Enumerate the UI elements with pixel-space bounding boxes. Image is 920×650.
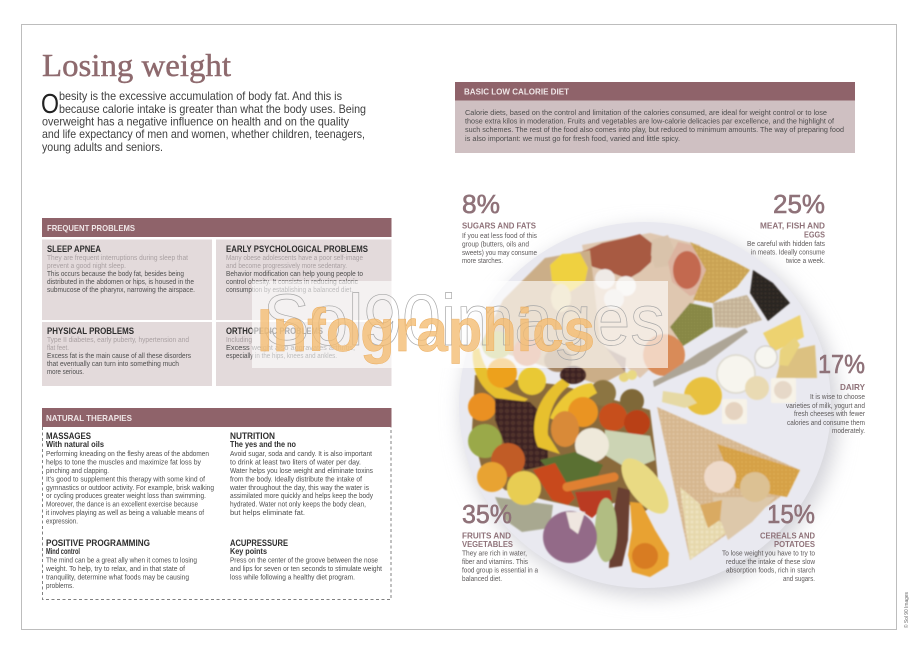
label: cereals and potatoes 15%: and sugars.: [783, 576, 815, 583]
therapy: massages: Moreover, the dance is an excellent exercise because: [46, 502, 198, 508]
panel: natural therapies: [42, 408, 392, 600]
card: sleep apnea: This occurs because the body fat, besides being: [47, 271, 184, 278]
label: meat, fish and eggs 25%: 25%: [773, 189, 825, 219]
label: dairy 17%: 17%: [818, 349, 865, 379]
therapy: massages: With natural oils: [46, 439, 104, 449]
label: sugars and fats 8%: 8%: [462, 189, 500, 219]
label: sugars and fats 8%: more starches.: [462, 258, 503, 265]
label: cereals and potatoes 15%: absorption foods, rich in starch: [726, 568, 815, 574]
label: fruits and vegetables 35%: VEGETABLES: [462, 539, 513, 549]
therapy: acupressure: Press on the center of the groove between the nose: [230, 558, 378, 564]
food: cereals and potatoes: [657, 407, 800, 560]
card: physical problems: [42, 322, 212, 386]
card: orthopedic problems: ORTHOPEDIC PROBLEMS: [226, 326, 323, 337]
therapy: massages: expression.: [46, 518, 78, 526]
therapy: massages: gymnastics or outdoor activity. For example, brisk walking: [46, 485, 214, 492]
natural therapies header: NATURAL THERAPIES: [46, 413, 132, 423]
label: meat, fish and eggs 25%: [747, 189, 825, 265]
panel: basic low calorie diet: those extra kilos in moderation. Fruits and vegetables are low-calorie delicacies par excellence, and the highlight of: [465, 118, 834, 126]
therapy: positive programming: [45, 538, 197, 590]
food: fruits and vegetables: [468, 348, 677, 577]
intro paragraph: [41, 88, 366, 154]
therapy: positive programming: weight. To help, try to relax, and in that state of: [45, 566, 185, 573]
therapy: massages: It's good to supplement this therapy with some kind of: [46, 476, 205, 484]
therapy: massages: helps to tone the muscles and maximize fat loss by: [46, 460, 201, 466]
panel: basic low calorie diet: BASIC LOW CALORIE DIET: [464, 86, 570, 96]
food: dairy: [662, 315, 817, 424]
credit line: © Sol 90 Images: [903, 592, 910, 628]
label: meat, fish and eggs 25%: EGGS: [804, 230, 825, 240]
label: cereals and potatoes 15%: [722, 499, 816, 583]
therapy: acupressure: Key points: [230, 546, 267, 556]
food: sugars and fats: [480, 250, 625, 385]
chart: food plate: [459, 222, 838, 596]
card: orthopedic problems: especially in the hips, knees and ankles.: [226, 353, 337, 360]
label: cereals and potatoes 15%: CEREALS AND: [760, 530, 815, 540]
label: cereals and potatoes 15%: To lose weight you have to try to: [722, 550, 815, 558]
label: fruits and vegetables 35%: FRUITS AND: [462, 530, 511, 540]
watermark: Infographics: [257, 297, 595, 364]
therapy: nutrition: Water helps you lose weight and eliminate toxins: [230, 468, 373, 475]
therapy: nutrition: from the body. Ideally distribute the intake of: [230, 476, 362, 484]
card: physical problems: more serious.: [47, 369, 84, 376]
therapy: massages: [46, 431, 214, 526]
card: physical problems: Type II diabetes, early puberty, hypertension and: [47, 337, 189, 344]
label: meat, fish and eggs 25%: Be careful with hidden fats: [747, 241, 825, 248]
card: early psychological problems: and become progressively more sedentary.: [226, 263, 347, 270]
natural therapies header: [42, 408, 392, 427]
label: cereals and potatoes 15%: 15%: [767, 499, 815, 529]
therapy: massages: it involves playing as well as being a valuable means of: [46, 510, 204, 517]
intro paragraph: young adults and seniors.: [42, 140, 163, 154]
title: Losing weight: [42, 47, 231, 83]
panel: basic low calorie diet: [455, 82, 855, 153]
therapy: positive programming: tranquility, determine what foods may be causing: [46, 574, 189, 582]
frequent problems header: FREQUENT PROBLEMS: [47, 223, 135, 233]
therapy: nutrition: [229, 431, 373, 517]
label: fruits and vegetables 35%: food group is essential in a: [462, 568, 538, 574]
card: sleep apnea: submucose of the pharynx, narrowing the airspace.: [47, 287, 195, 294]
therapy: massages: MASSAGES: [46, 431, 91, 442]
therapy: nutrition: hydrated. Water not only keeps the body clean,: [230, 502, 366, 508]
watermark: Sol90images: [263, 281, 665, 361]
label: fruits and vegetables 35%: [462, 499, 538, 583]
label: sugars and fats 8%: sweets) you may consume: [462, 250, 537, 257]
intro paragraph: and life expectancy of men and women, whether children, teenagers,: [42, 127, 365, 141]
card: early psychological problems: Behavior modification can help young people to: [226, 271, 363, 278]
card: physical problems: that eventually can turn into something much: [47, 361, 179, 368]
card: sleep apnea: distributed in the abdomen or hips, is housed in the: [47, 279, 194, 286]
intro paragraph: because calorie intake is greater than what the body uses. Being: [59, 102, 366, 116]
therapy: massages: pinching and clapping.: [46, 468, 109, 475]
therapy: nutrition: Avoid sugar, soda and candy. It is also important: [230, 451, 372, 458]
label: fruits and vegetables 35%: balanced diet.: [462, 576, 502, 583]
food: meat, fish and eggs: [582, 233, 790, 387]
intro paragraph: overweight has a negative influence on health and on the quality: [42, 114, 349, 128]
therapy: positive programming: The mind can be a great ally when it comes to losing: [46, 558, 197, 564]
natural therapies dashed border: [42, 427, 391, 600]
therapy: positive programming: Mind control: [46, 546, 80, 556]
panel: basic low calorie diet: Calorie diets, based on the control and limitation of the calories consumed, are ideal for weight control or to lose: [465, 110, 827, 117]
label: cereals and potatoes 15%: reduce the intake of these slow: [726, 559, 816, 566]
card: physical problems: flat feet.: [47, 345, 69, 352]
label: sugars and fats 8%: [462, 189, 537, 265]
therapy: nutrition: The yes and the no: [230, 439, 296, 449]
label: cereals and potatoes 15%: POTATOES: [774, 539, 815, 549]
label: fruits and vegetables 35%: They are rich in water,: [462, 550, 527, 558]
card: sleep apnea: SLEEP APNEA: [47, 244, 101, 255]
card: early psychological problems: Many obese adolescents have a poor self-image: [226, 255, 363, 262]
panel: basic low calorie diet: such schemes. The rest of the food also comes into play, but reduced to minimum amounts. The way of preparing food: [465, 127, 844, 134]
therapy: nutrition: but helps eliminate fat.: [230, 510, 305, 517]
therapy: nutrition: to drink at least two liters of water per day.: [230, 460, 361, 466]
intro paragraph: O: [41, 88, 59, 119]
label: dairy 17%: fresh cheeses with fewer: [794, 411, 866, 418]
therapy: acupressure: loss while following a healthy diet program.: [230, 574, 355, 582]
therapy: acupressure: ACUPRESSURE: [230, 538, 288, 549]
card: sleep apnea: They are frequent interruptions during sleep that: [47, 255, 188, 262]
plate shadow: [462, 228, 838, 596]
card: sleep apnea: [42, 240, 212, 320]
label: sugars and fats 8%: group (butters, oils and: [462, 242, 529, 248]
card: physical problems: PHYSICAL PROBLEMS: [47, 326, 134, 337]
frequent problems header: [42, 218, 392, 237]
label: dairy 17%: DAIRY: [840, 382, 865, 392]
label: sugars and fats 8%: SUGARS AND FATS: [462, 220, 536, 230]
therapy: positive programming: POSITIVE PROGRAMMING: [46, 538, 150, 549]
therapy: positive programming: problems.: [46, 583, 74, 590]
card: sleep apnea: prevent a good night sleep.: [47, 263, 126, 270]
intro paragraph: besity is the excessive accumulation of body fat. And this is: [59, 89, 342, 103]
label: dairy 17%: [786, 349, 866, 435]
label: dairy 17%: moderately.: [832, 428, 865, 435]
card: physical problems: Excess fat is the main cause of all these disorders: [47, 353, 191, 360]
label: meat, fish and eggs 25%: twice a week.: [786, 258, 825, 265]
therapy: massages: Performing kneading on the fleshy areas of the abdomen: [46, 451, 209, 458]
label: dairy 17%: varieties of milk, yogurt and: [786, 403, 865, 410]
label: fruits and vegetables 35%: fiber and vitamins. This: [462, 559, 528, 566]
card: early psychological problems: EARLY PSYCHOLOGICAL PROBLEMS: [226, 244, 368, 255]
label: meat, fish and eggs 25%: MEAT, FISH AND: [760, 220, 825, 230]
label: meat, fish and eggs 25%: in meats. Ideally consume: [751, 250, 825, 256]
therapy: acupressure: [230, 538, 382, 582]
label: dairy 17%: It is wise to choose: [810, 394, 865, 401]
therapy: nutrition: water throughout the day, this way the water is: [229, 485, 369, 492]
therapy: acupressure: and lips for seven or ten seconds to stimulate weight: [230, 566, 382, 573]
card: early psychological problems: consumption by establishing a balanced diet.: [226, 287, 353, 294]
plate: [459, 222, 831, 588]
card: early psychological problems: control obesity. It consists in reducing caloric: [226, 279, 358, 286]
label: dairy 17%: calories and consume them: [787, 420, 865, 427]
label: fruits and vegetables 35%: 35%: [462, 499, 512, 529]
card: orthopedic problems: [216, 322, 392, 386]
card: orthopedic problems: Including: [226, 337, 252, 344]
therapy: massages: or cycling produces greater weight loss than swimming.: [46, 493, 206, 500]
panel: frequent problems: [42, 218, 392, 386]
therapy: nutrition: NUTRITION: [230, 431, 275, 442]
label: sugars and fats 8%: If you eat less food of this: [462, 233, 537, 240]
therapy: nutrition: assimilated more quickly and helps keep the body: [230, 493, 373, 500]
card: early psychological problems: [216, 240, 392, 320]
panel: basic low calorie diet: is also important: we must go for fresh food, varied and little spicy.: [465, 136, 680, 143]
card: orthopedic problems: Excess weight also aggravates arthritis,: [226, 345, 355, 352]
